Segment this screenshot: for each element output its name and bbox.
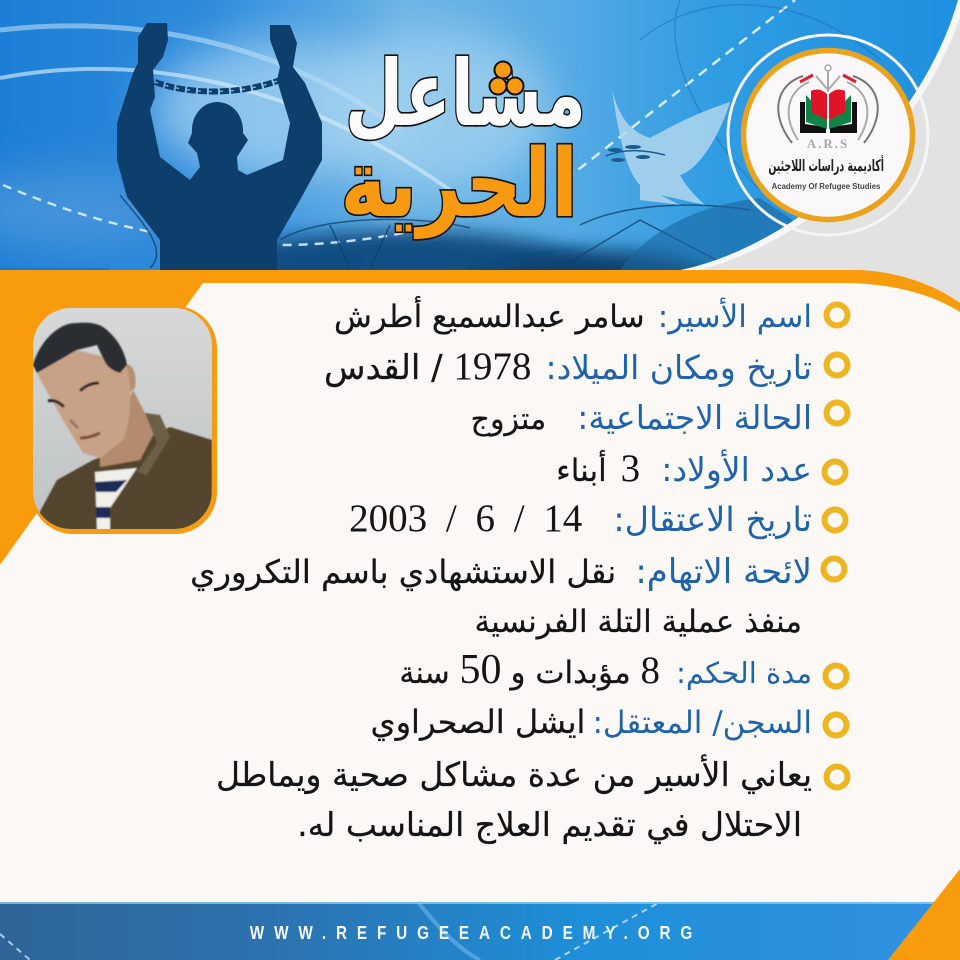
face (37, 350, 130, 458)
birth row: تاريخ ومكان الميلاد: 1978 / القدس (324, 345, 812, 388)
striped shirt (95, 468, 137, 530)
footer band (0, 869, 960, 960)
health row: يعاني الأسير من عدة مشاكل صحية ويماطل (216, 755, 812, 794)
title: مشاعل: مشاعل (345, 41, 586, 147)
footer website address: WWW.REFUGEEACADEMY.ORG (250, 923, 702, 943)
bullet markers (824, 304, 848, 788)
orange frame band (0, 270, 960, 330)
charges row continued: منفذ عملية التلة الفرنسية (474, 604, 802, 640)
collar (137, 413, 170, 475)
logo emblem: book (778, 65, 878, 143)
health row continued: الاحتلال في تقديم العلاج المناسب له. (297, 805, 802, 844)
logo text: English name: Academy Of Refugee Studies (772, 182, 881, 191)
sentence row: مدة الحكم: 8 مؤبدات و50 سنة (399, 647, 812, 693)
grey header corner background (0, 0, 960, 320)
logo text: A.R.S: A.R.S (807, 136, 849, 151)
dove with olive branch (606, 90, 730, 205)
ear (125, 365, 136, 395)
header banner (0, 0, 960, 270)
barbed wire fence (120, 195, 750, 268)
white content panel (0, 283, 960, 902)
arrest date row: تاريخ الاعتقال: 14 / 6 / 2003 (349, 497, 812, 540)
prison row: السجن/ المعتقل: ايشل الصحراوي (371, 703, 812, 741)
jacket (37, 427, 212, 530)
neck (100, 390, 160, 467)
eyes, nose and mouth (48, 383, 99, 407)
blue corner under orange curve (0, 268, 110, 308)
marital status row: الحالة الاجتماعية: متزوج (471, 398, 812, 437)
prisoner photo (31, 306, 217, 534)
silhouette of prisoner with raised chained hands (117, 23, 322, 270)
hair (33, 323, 127, 373)
charges row: لائحة الاتهام: نقل الاستشهادي باسم التكروري (190, 552, 812, 592)
name row: اسم الأسير: سامر عبدالسميع أطرش (334, 299, 812, 335)
logo text: Arabic name: أكاديمية دراسات اللاجئين (768, 155, 884, 176)
orange left wedge (0, 270, 210, 565)
children row: عدد الأولاد: 3 أبناء (556, 447, 812, 490)
logo badge (728, 35, 928, 235)
title: الحرية: الحرية (340, 130, 578, 239)
